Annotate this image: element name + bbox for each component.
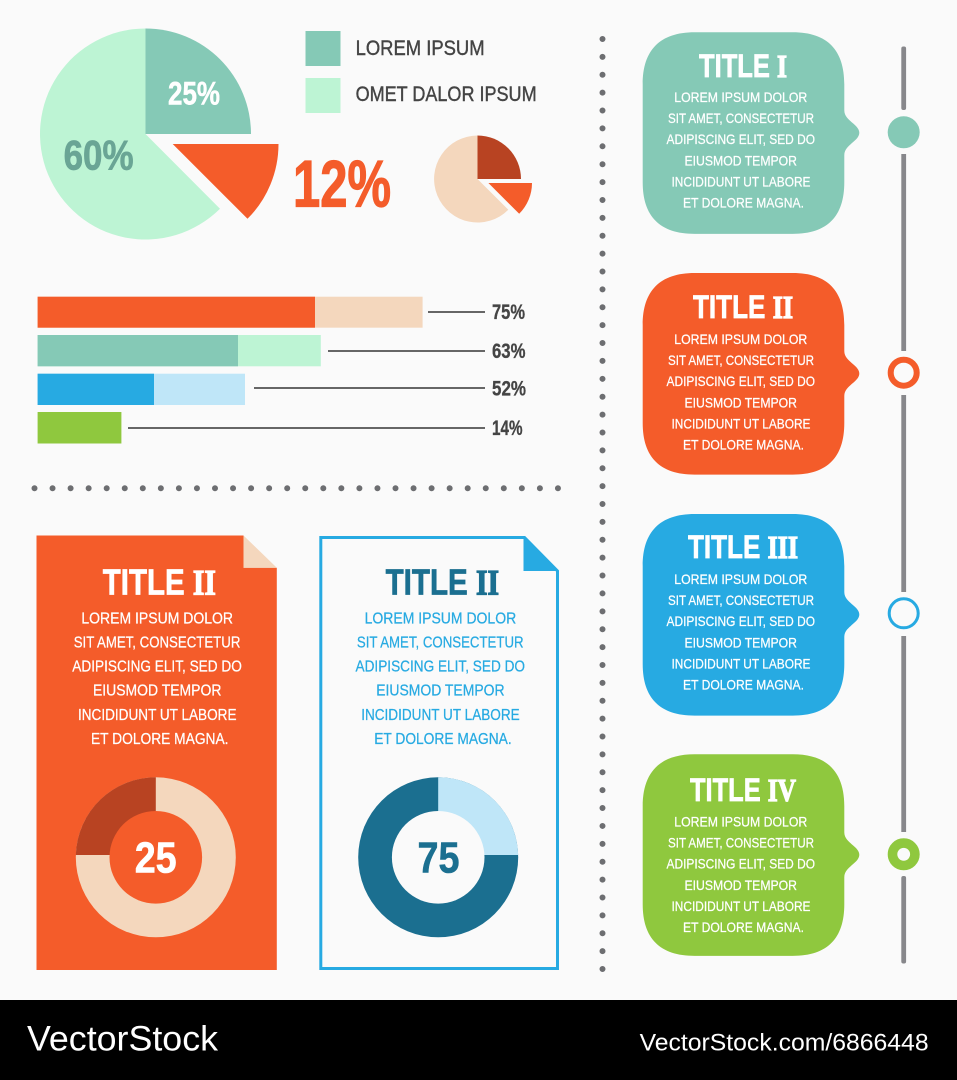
bubble title: TITLE II xyxy=(693,289,793,325)
card outline xyxy=(321,538,558,968)
bubble text: INCIDIDUNT UT LABORE xyxy=(672,655,810,671)
timeline marker 3: blue ring xyxy=(889,599,918,628)
panel: speech bubble title II xyxy=(643,273,859,475)
bubble text: ADIPISCING ELIT, SED DO xyxy=(666,131,815,147)
donut chart: 25 xyxy=(76,777,236,937)
panel: speech bubble title IV xyxy=(643,754,859,956)
card text: ET DOLORE MAGNA. xyxy=(374,731,512,748)
card text xyxy=(356,610,525,748)
bar: 52%: 52% xyxy=(492,378,526,401)
bubble text xyxy=(666,89,815,210)
small pie chart xyxy=(434,136,532,222)
bubble shape xyxy=(643,273,859,475)
bubble text: SIT AMET, CONSECTETUR xyxy=(668,110,814,126)
bubble text: EIUSMOD TEMPOR xyxy=(684,152,797,168)
bubble text: LOREM IPSUM DOLOR xyxy=(674,571,807,587)
panel: speech bubble title III xyxy=(643,514,859,716)
bar: 52% xyxy=(38,374,526,405)
bubble text: SIT AMET, CONSECTETUR xyxy=(668,592,814,608)
card text: LOREM IPSUM DOLOR xyxy=(365,610,516,627)
bubble text: ET DOLORE MAGNA. xyxy=(683,436,804,452)
bubble text: EIUSMOD TEMPOR xyxy=(684,394,797,410)
card text xyxy=(72,610,242,748)
label: 60%: 60% xyxy=(64,131,134,178)
bubble text: ET DOLORE MAGNA. xyxy=(683,919,804,935)
footer bar xyxy=(0,1000,957,1080)
bubble shape xyxy=(643,514,859,716)
bubble text: LOREM IPSUM DOLOR xyxy=(674,331,807,347)
bubble title: TITLE I xyxy=(699,48,787,84)
timeline xyxy=(888,46,920,964)
card text: ET DOLORE MAGNA. xyxy=(91,731,228,748)
bubble text: ET DOLORE MAGNA. xyxy=(683,676,804,692)
bubble text: SIT AMET, CONSECTETUR xyxy=(668,835,814,851)
bubble shape xyxy=(643,754,859,956)
footer logo text: VectorStock xyxy=(27,1020,219,1059)
bubble text: ADIPISCING ELIT, SED DO xyxy=(666,373,815,389)
donut chart: 25: 25 xyxy=(135,834,177,883)
timeline marker 2: orange ring xyxy=(891,360,917,386)
timeline line segments xyxy=(901,46,906,964)
card title: TITLE II xyxy=(103,562,216,603)
bar: 14%: 14% xyxy=(492,417,523,440)
footer background xyxy=(0,1000,957,1080)
bubble title: TITLE IV xyxy=(690,772,796,808)
bar: 14% xyxy=(38,412,523,444)
pie slice: 12% exploded xyxy=(173,144,278,219)
pie slice: 25% xyxy=(146,28,251,134)
bubble text xyxy=(666,331,815,452)
bubble shape xyxy=(643,32,859,234)
bubble text xyxy=(666,814,815,935)
bubble text: INCIDIDUNT UT LABORE xyxy=(672,173,810,189)
label: 25%: 25% xyxy=(168,75,220,111)
bubble text: LOREM IPSUM DOLOR xyxy=(674,89,807,105)
panel: speech bubble title I xyxy=(643,32,859,234)
card text: EIUSMOD TEMPOR xyxy=(93,683,221,700)
pie slice: 60% xyxy=(40,28,220,240)
small pie: orange exploded slice xyxy=(488,183,532,214)
bar: 75% xyxy=(38,297,525,328)
bar: 63% xyxy=(38,335,526,366)
card body xyxy=(36,536,277,970)
small pie: dark slice xyxy=(478,136,521,179)
card text: SIT AMET, CONSECTETUR xyxy=(357,634,524,652)
card text: INCIDIDUNT UT LABORE xyxy=(78,707,236,724)
card text: INCIDIDUNT UT LABORE xyxy=(361,707,520,724)
bubble text: EIUSMOD TEMPOR xyxy=(684,877,797,893)
folded corner xyxy=(524,536,559,571)
donut chart: 75: 75 xyxy=(418,834,460,883)
bubble text: ADIPISCING ELIT, SED DO xyxy=(666,613,815,629)
bubble text: ET DOLORE MAGNA. xyxy=(683,194,804,210)
small pie: peach slice xyxy=(434,136,508,222)
card text: ADIPISCING ELIT, SED DO xyxy=(72,659,242,676)
folded corner xyxy=(244,536,277,568)
timeline marker 4: green dot ring xyxy=(892,843,915,866)
bar chart xyxy=(38,297,526,444)
bubble text: INCIDIDUNT UT LABORE xyxy=(672,415,810,431)
bubble text: EIUSMOD TEMPOR xyxy=(684,634,797,650)
legend label: lorem ipsum: LOREM IPSUM xyxy=(356,37,485,60)
big stat: 12%: 12% xyxy=(293,147,391,221)
donut chart: 75 xyxy=(358,777,518,937)
timeline marker 1: solid teal xyxy=(888,116,920,148)
bubble text: LOREM IPSUM DOLOR xyxy=(674,814,807,830)
legend swatch: mint xyxy=(306,78,340,113)
bubble text xyxy=(666,571,815,692)
bubble text: INCIDIDUNT UT LABORE xyxy=(672,898,810,914)
panel: main pie chart xyxy=(40,28,279,240)
legend label: omet dalor ipsum: OMET DALOR IPSUM xyxy=(356,83,537,106)
card title: TITLE II xyxy=(386,562,499,602)
bar: 63%: 63% xyxy=(492,340,526,363)
card text: LOREM IPSUM DOLOR xyxy=(81,610,233,627)
bubble title: TITLE III xyxy=(688,529,798,565)
bar: 75%: 75% xyxy=(492,301,525,324)
card text: EIUSMOD TEMPOR xyxy=(376,683,505,700)
footer url text: VectorStock.com/6866448 xyxy=(640,1030,929,1057)
bubble text: ADIPISCING ELIT, SED DO xyxy=(666,856,815,872)
legend xyxy=(306,31,537,113)
card text: ADIPISCING ELIT, SED DO xyxy=(356,659,525,676)
panel: blue outlined document card xyxy=(321,536,559,968)
panel: orange document card xyxy=(36,536,277,970)
card text: SIT AMET, CONSECTETUR xyxy=(74,634,240,652)
legend swatch: teal xyxy=(306,31,340,66)
bubble text: SIT AMET, CONSECTETUR xyxy=(668,352,814,368)
